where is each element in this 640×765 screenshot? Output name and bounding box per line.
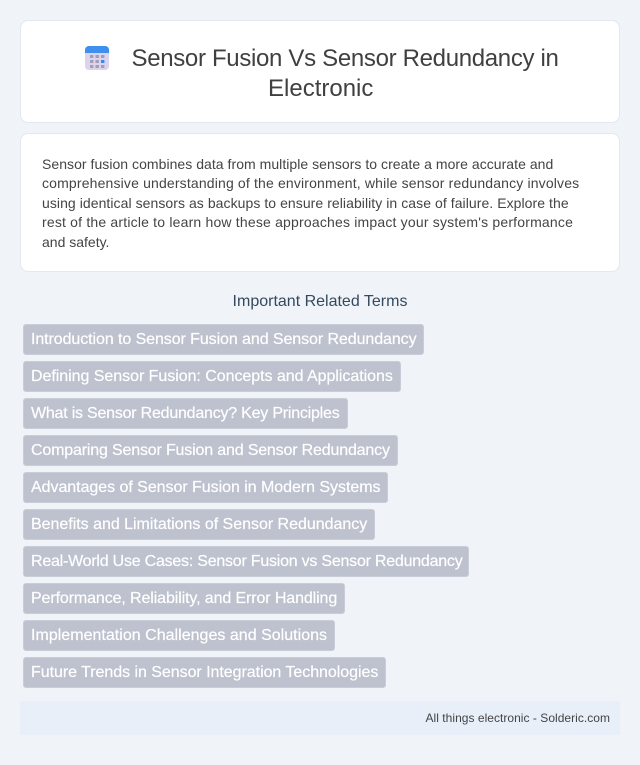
tag 7: Real-World Use Cases: Sensor Fusion vs Sensor Redundancy: [31, 553, 462, 570]
tag 5: Advantages of Sensor Fusion in Modern Systems: [31, 479, 380, 496]
tag 1: Introduction to Sensor Fusion and Sensor Redundancy: [31, 331, 416, 348]
tag 6: [23, 509, 375, 540]
footer: [20, 701, 620, 735]
related terms heading: Important Related Terms: [233, 293, 407, 310]
intro text: rest of the article to learn how these approaches impact your system's performance: [42, 214, 573, 230]
intro text: Sensor fusion combines data from multiple sensors to create a more accurate and: [42, 156, 553, 172]
title: Electronic: [268, 75, 373, 102]
tag 2: Defining Sensor Fusion: Concepts and Applications: [31, 368, 393, 385]
tag 5: [23, 472, 388, 503]
icon: calendar grid: [85, 46, 109, 70]
tag 10: Future Trends in Sensor Integration Technologies: [31, 664, 378, 681]
tag 9: Implementation Challenges and Solutions: [31, 627, 327, 644]
header panel: [20, 20, 620, 123]
footer: All things electronic - Solderic.com: [426, 711, 610, 725]
tag 6: Benefits and Limitations of Sensor Redundancy: [31, 516, 367, 533]
tag 8: Performance, Reliability, and Error Handling: [31, 590, 337, 607]
tag 2: [23, 361, 401, 392]
tag 3: [23, 398, 348, 429]
title: Sensor Fusion Vs Sensor Redundancy in: [132, 45, 559, 72]
tag 4: Comparing Sensor Fusion and Sensor Redundancy: [31, 442, 390, 459]
tag 8: [23, 583, 345, 614]
intro text: using identical sensors as backups to ensure reliability in case of failure. Explore the: [42, 195, 569, 211]
tag 9: [23, 620, 335, 651]
tag 7: [23, 546, 469, 577]
intro panel: [20, 133, 620, 272]
intro text: and safety.: [42, 234, 109, 250]
intro text: [42, 156, 579, 250]
tag 4: [23, 435, 398, 466]
intro text: comprehensive understanding of the environment, while sensor redundancy involves: [42, 175, 579, 191]
tag 1: [23, 324, 424, 355]
tag 10: [23, 657, 386, 688]
tag 3: What is Sensor Redundancy? Key Principles: [31, 405, 339, 422]
title: [132, 45, 559, 102]
